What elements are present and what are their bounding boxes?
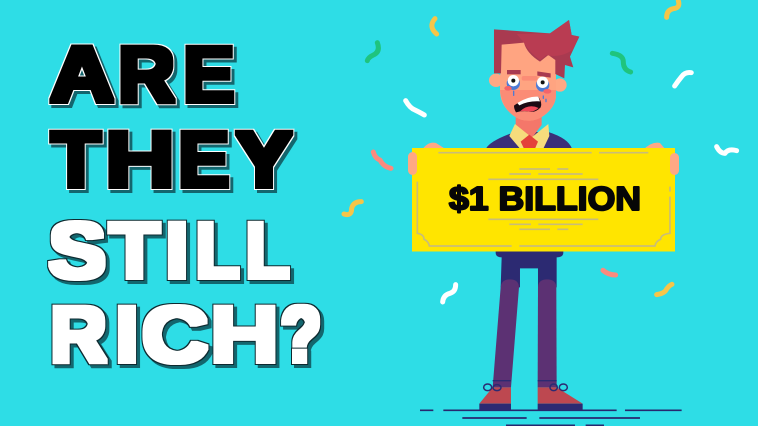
money cheque <box>408 143 679 252</box>
left hand back <box>422 143 447 150</box>
trousers <box>496 247 563 287</box>
tie <box>521 135 538 149</box>
lower face shade <box>500 90 556 121</box>
heading line: RICH?: ? <box>281 290 321 378</box>
heading line: RICH?: R <box>50 290 107 378</box>
character: legs and shoes <box>479 247 583 410</box>
left eye <box>507 75 520 90</box>
neck <box>516 110 542 138</box>
left shoe <box>479 381 511 410</box>
ground lines <box>420 410 682 425</box>
title: ARE THEY STILL RICH? <box>48 30 321 378</box>
heading line: STILL: S <box>48 206 106 294</box>
heading line: THEY <box>51 114 292 204</box>
heading line: THEY: T <box>51 114 101 204</box>
heading line: ARE: A <box>50 30 114 118</box>
open mouth <box>514 97 541 112</box>
cheque background <box>412 148 675 252</box>
right fingers <box>670 153 679 175</box>
heading line: RICH? <box>50 290 321 378</box>
heading line: STILL: I <box>165 206 189 294</box>
nose bridge <box>522 76 538 81</box>
face <box>500 40 556 121</box>
heading line: STILL: L <box>196 206 239 294</box>
heading line: STILL: T <box>109 206 160 294</box>
heading line: ARE: R <box>118 30 175 118</box>
heading line: STILL: L <box>246 206 289 294</box>
tears <box>514 91 546 102</box>
right leg <box>538 279 557 387</box>
cheque engraved lines <box>417 153 670 246</box>
heading line: RICH?: H <box>210 290 279 378</box>
heading line: ARE <box>50 30 234 118</box>
hair <box>494 20 579 78</box>
cheque amount: $1 BILLION <box>449 180 641 217</box>
heading line: THEY: Y <box>236 114 292 204</box>
heading line: ARE: E <box>183 30 234 118</box>
left leg <box>493 279 519 387</box>
ears <box>489 74 567 92</box>
heading line: THEY: H <box>105 114 175 204</box>
left fingers <box>408 152 417 175</box>
heading line: THEY: E <box>178 114 229 204</box>
right eye <box>536 77 549 92</box>
confetti <box>344 1 737 302</box>
character: upper body and head <box>486 20 579 149</box>
eyebrows <box>507 70 551 78</box>
heading line: RICH?: C <box>142 290 208 378</box>
hair fringe <box>517 20 579 60</box>
right hand back <box>643 143 666 150</box>
cheeks <box>504 86 551 94</box>
collar <box>509 124 549 149</box>
heading line: STILL <box>48 206 289 294</box>
heading line: RICH?: I <box>115 290 139 378</box>
right shoe <box>538 381 583 410</box>
suit jacket <box>486 132 572 149</box>
